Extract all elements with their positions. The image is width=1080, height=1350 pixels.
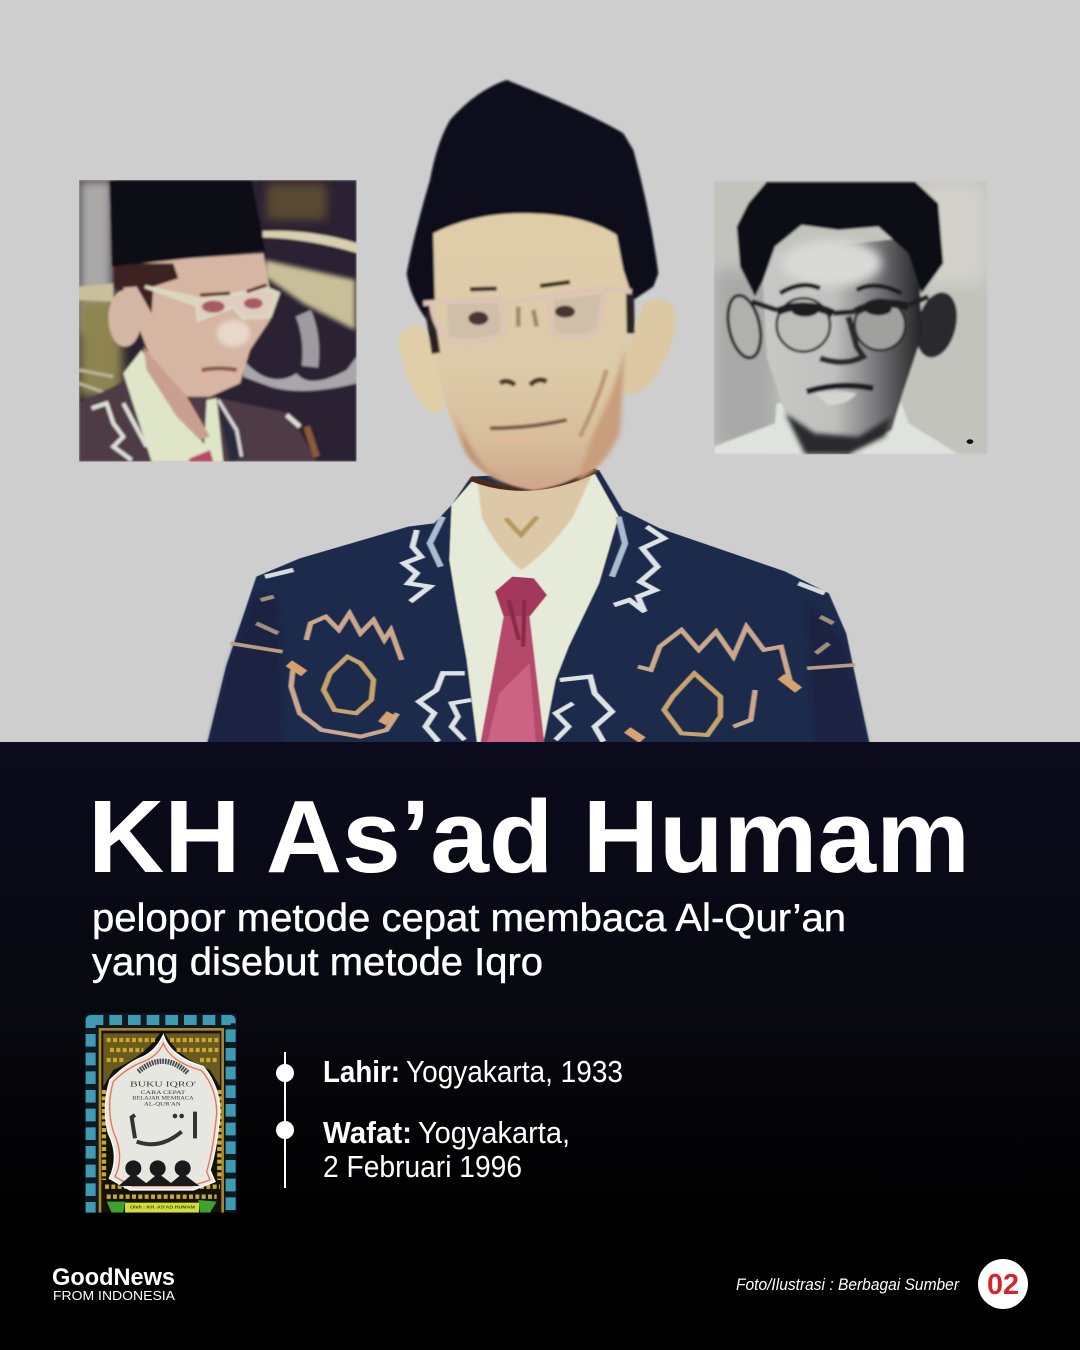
page number badge: 02: [987, 1269, 1019, 1301]
book cover: Buku Iqro: BELAJAR MEMBACA: [132, 1096, 194, 1101]
dark bottom panel: [0, 742, 1080, 1350]
subtitle: [92, 897, 846, 984]
book cover: Buku Iqro: AL-QUR'AN: [144, 1102, 181, 1107]
photo credit: Foto/Ilustrasi : Berbagai Sumber: [736, 1275, 960, 1294]
page number badge: [978, 1259, 1028, 1309]
subtitle: pelopor metode cepat membaca Al-Qur’an: [92, 897, 846, 940]
logo: GoodNews: [52, 1264, 175, 1303]
text: birth: Lahir:: [323, 1054, 400, 1089]
text: birth: [323, 1054, 623, 1089]
title: KH As’ad Humam: [88, 779, 970, 894]
text: birth: Yogyakarta, 1933: [406, 1054, 623, 1089]
photo: left inset profile: [79, 180, 357, 462]
book cover: Buku Iqro: BUKU IQRO': [130, 1080, 197, 1089]
photo: right inset black and white portrait: [714, 181, 988, 454]
book cover: Buku Iqro: [85, 1013, 237, 1220]
background: [0, 0, 1080, 742]
book cover: Buku Iqro: CARA CEPAT: [141, 1091, 185, 1096]
subtitle: yang disebut metode Iqro: [92, 941, 543, 984]
text: death: 2 Februari 1996: [323, 1149, 522, 1184]
photo: main portrait: [207, 80, 870, 747]
portrait head: [398, 80, 676, 491]
logo: GoodNews: GoodNews: [52, 1264, 175, 1291]
text: death: Yogyakarta,: [418, 1115, 570, 1150]
portrait suit and shirt: [207, 470, 870, 747]
logo: GoodNews: FROM INDONESIA: [53, 1288, 175, 1303]
timeline: [276, 1052, 294, 1188]
book cover: Buku Iqro: Oleh : KH. AS'AD HUMAM: [130, 1205, 195, 1210]
text: death: [323, 1115, 570, 1184]
text: death: Wafat:: [323, 1115, 412, 1150]
